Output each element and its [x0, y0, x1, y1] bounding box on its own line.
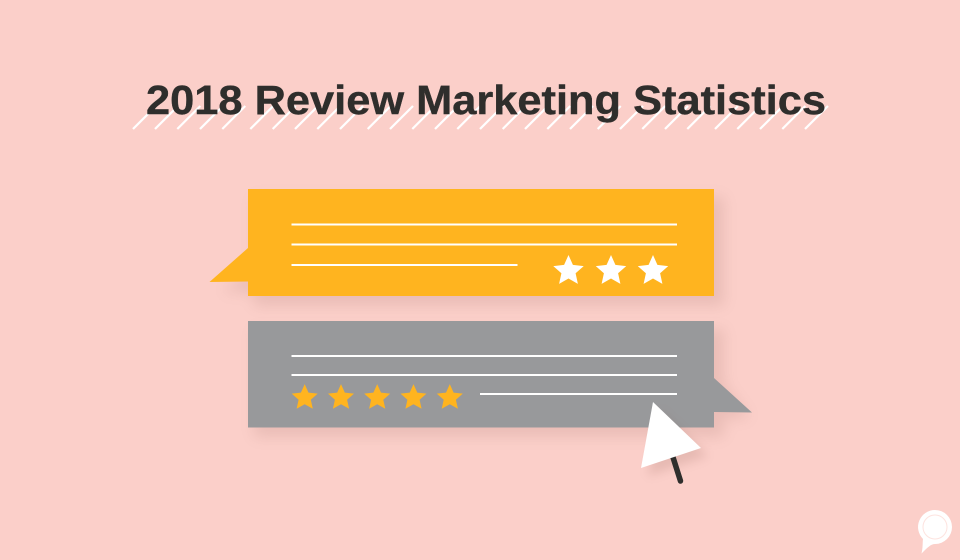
five orange stars: [292, 384, 463, 409]
cursor arrow: [641, 402, 701, 468]
bubble shadow: [222, 197, 724, 306]
cursor handle: [671, 451, 680, 481]
bubble body: [248, 321, 752, 428]
logo inner ring: [923, 515, 947, 539]
icon: brand logo: [918, 510, 952, 554]
title: 2018 Review Marketing Statistics: [146, 77, 826, 123]
icon: mouse cursor: [641, 402, 708, 481]
logo speech bubble: [918, 510, 952, 554]
title hatch underline: [133, 106, 828, 129]
three white stars: [553, 255, 668, 284]
text lines: [292, 224, 677, 266]
bubble shadow: [254, 329, 750, 437]
panel: orange review bubble: [210, 189, 724, 306]
text lines: [292, 355, 677, 395]
panel: gray review bubble: [248, 321, 752, 437]
cursor shadow: [648, 410, 708, 476]
bubble body: [210, 189, 714, 296]
